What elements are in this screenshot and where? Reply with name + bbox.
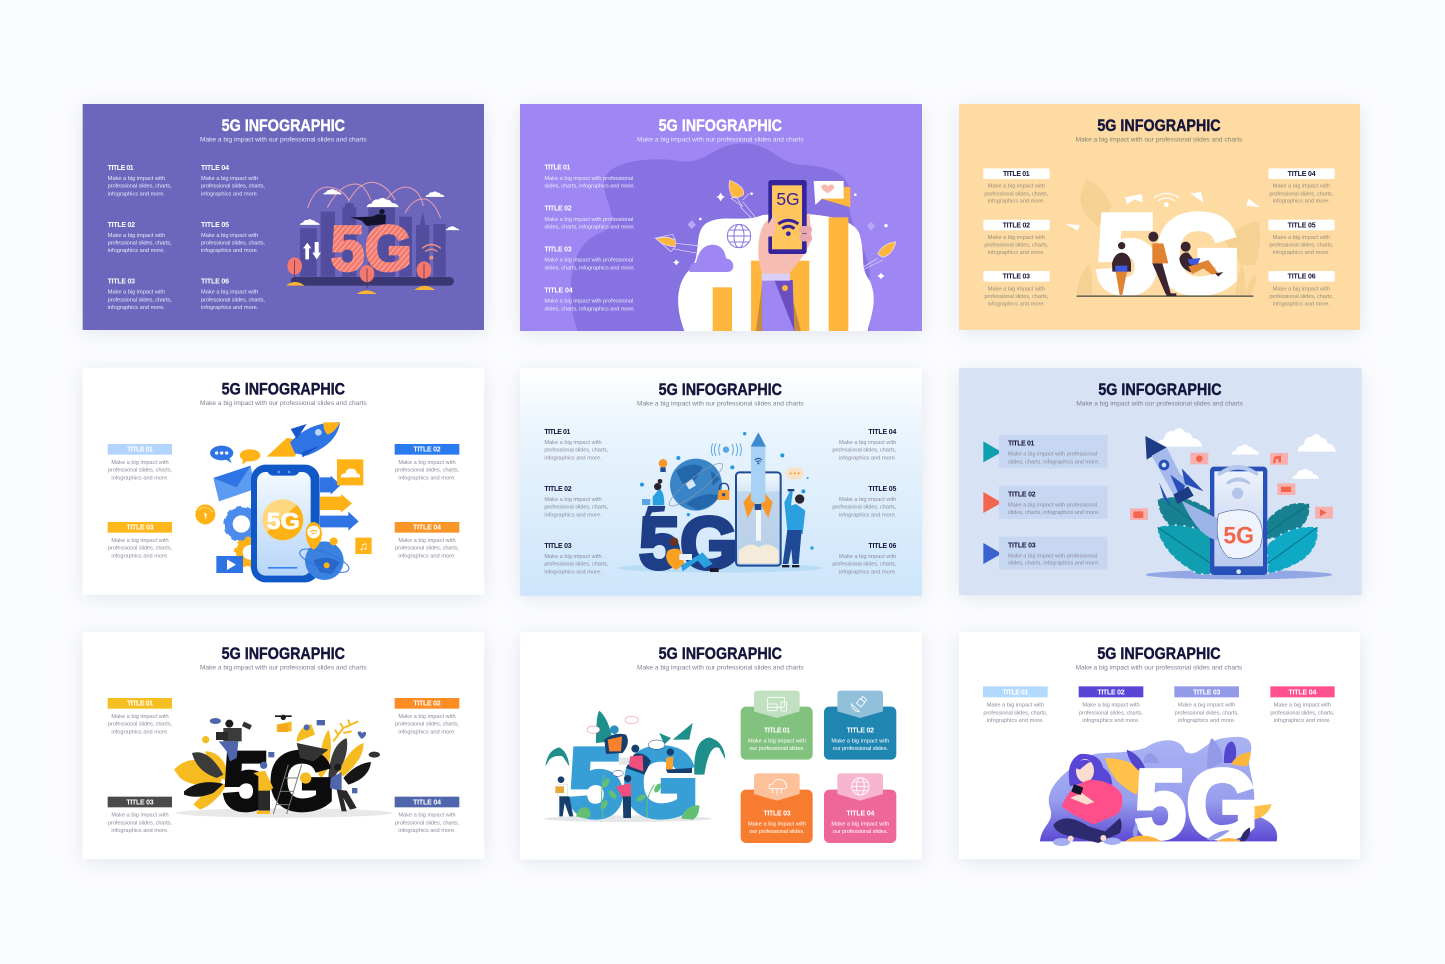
block: title 01: Make a big impact with [988,184,1045,190]
block: title 06: professional slides, charts, [1269,294,1334,300]
block: title 02: infographics and more. [398,729,456,735]
block: title 03: professional slides, charts, [984,294,1049,300]
block: title 04: infographics and more. [1274,718,1331,724]
block: title 03: infographics and more. [988,301,1045,307]
panel background [83,368,484,595]
panel background [520,368,922,596]
block: title 03 with blue arrow [983,537,1108,570]
background blob [571,143,870,331]
panel background [520,632,922,860]
card: title 03: Make a big impact with [748,822,806,828]
block: title 03: infographics and more. [111,828,169,834]
block: title 01: Make a big impact with [987,703,1044,709]
card: title 04: our professional slides. [833,829,888,835]
text block: title 06: Make a big impact with [839,554,896,560]
block: title 02: professional slides, charts, [1079,710,1143,716]
text block: title 04: infographics and more. [839,455,897,461]
block: title 03: TITLE 03 [1193,689,1220,696]
block: title 04: TITLE 04 [1288,689,1316,696]
block: title 06 [1268,271,1335,307]
panel background [83,632,484,859]
block: title 06: TITLE 06 [1288,274,1316,281]
block: title 02: Make a big impact with [988,235,1045,241]
text block: title 02 [544,206,635,231]
panel: white black-and-yellow 5G slide [83,632,484,859]
heading: 5G INFOGRAPHIC [1098,380,1222,399]
block: title 04: infographics and more. [398,828,456,834]
illustration: rocket, phone and leaves: 5G [1223,522,1254,549]
block: title 03 [108,797,172,834]
block: title 02: TITLE 02 [413,447,441,454]
text block: title 01: professional slides, charts, [108,184,172,190]
block: title 05: professional slides, charts, [1269,243,1334,249]
text block: title 02: professional slides, charts, [108,240,172,246]
text block: title 03: Make a big impact with [544,554,602,560]
text block: title 04: Make a big impact with [839,440,896,446]
text block: title 06: TITLE 06 [201,279,229,286]
heading: 5G INFOGRAPHIC [659,380,782,399]
block: title 03: professional slides, charts, [1175,710,1239,716]
text block: title 02: Make a big impact with [108,233,165,239]
illustration: globe, rocket, phone and 5G: 5G [639,503,738,585]
heading: 5G INFOGRAPHIC [659,644,782,663]
text block: title 05 [201,222,265,254]
text block: title 02: Make a big impact with professional [544,217,633,223]
card: title 01 [741,691,813,760]
card: title 04: TITLE 04 [846,810,874,817]
block: title 04: Make a big impact with [398,538,456,544]
block: title 02 [1079,686,1143,724]
block: title 02: TITLE 02 [413,701,441,708]
text block: title 03: infographics and more. [544,569,602,575]
block: title 01: professional slides, charts, [108,722,172,728]
text block: title 04: infographics and more. [201,191,259,197]
illustration: hand holding 5G phone with bars [654,180,896,331]
block: title 04: infographics and more. [1273,199,1330,205]
block: title 04: Make a big impact with [1274,703,1331,709]
block: title 03: TITLE 03 [126,525,154,532]
text block: title 01: professional slides, charts, [544,448,609,454]
subheading: Make a big impact with our professional slides and charts [637,136,804,143]
block: title 01: infographics and more. [987,718,1044,724]
panel background [520,104,922,331]
block: title 01 with teal arrow [983,435,1108,468]
text block: title 01: slides, charts, infographics and more. [544,184,635,190]
text block: title 05: infographics and more. [839,512,897,518]
block: title 01: TITLE 01 [1003,171,1030,178]
text block: title 02: TITLE 02 [544,206,572,213]
text block: title 03: professional slides, charts, [544,562,609,568]
text block: title 04 [201,165,265,197]
block: title 06: infographics and more. [1273,301,1330,307]
heading: 5G INFOGRAPHIC [222,379,345,398]
block: title 05: Make a big impact with [1273,235,1330,241]
text block: title 04: Make a big impact with professional [544,299,633,305]
block: title 04: TITLE 04 [413,799,441,806]
block: title 03: TITLE 03 [126,799,154,806]
block: title 02: infographics and more. [988,250,1045,256]
text block: title 06: infographics and more. [839,569,897,575]
block: title 03 [1174,686,1239,724]
text block: title 02 [544,486,609,518]
block: title 01: TITLE 01 [127,701,153,708]
block: title 05: TITLE 05 [1288,222,1316,229]
block: title 01: professional slides, charts, [983,710,1048,716]
block: title 03 [108,522,172,559]
block: title 03: Make a big impact with [111,813,169,819]
text block: title 06: TITLE 06 [868,543,896,550]
panel background [959,104,1360,330]
block: title 01 [108,444,172,481]
text block: title 05: professional slides, charts, [201,240,265,246]
block: title 01: infographics and more. [111,729,169,735]
block: title 04 [1268,168,1335,205]
card: title 01: Make a big impact with [748,739,806,745]
card: title 02: Make a big impact with [831,739,889,745]
block: title 01 [983,686,1048,724]
text block: title 06: professional slides, charts, [201,297,265,303]
illustration: black 5G with people and leaves: 5G [223,736,335,827]
block: title 04: professional slides, charts, [395,820,459,826]
block: title 03: infographics and more. [1178,718,1236,724]
block: title 01 with teal arrow: slides, charts, infographics and more. [1008,459,1100,465]
illustration: globe, rocket, phone and 5G [617,432,823,585]
illustration: phone with rocket and icons: ♫ [359,539,368,553]
block: title 03: TITLE 03 [1003,274,1030,281]
illustration: big 5G with three people: 5G [1097,193,1240,315]
block: title 01: TITLE 01 [127,447,153,454]
text block: title 03 [544,246,635,271]
text block: title 03: slides, charts, infographics and more. [544,265,635,271]
block: title 02: professional slides, charts, [395,722,459,728]
text block: title 06 [832,543,897,575]
text block: title 01: infographics and more. [108,191,165,197]
subheading: Make a big impact with our professional slides and charts [200,400,367,407]
block: title 03 with blue arrow: slides, charts, infographics and more. [1008,561,1100,567]
text block: title 03: professional slides, charts, [108,297,172,303]
text block: title 05: TITLE 05 [868,486,896,493]
block: title 05 [1268,220,1335,256]
block: title 04: TITLE 04 [413,525,441,532]
text block: title 02: infographics and more. [544,512,602,518]
block: title 02 [395,698,459,735]
illustration: phone with rocket and icons: 5G [267,508,300,534]
card: title 02 [824,691,896,760]
card: title 03: TITLE 03 [763,810,791,817]
text block: title 05: infographics and more. [201,248,259,254]
text block: title 04 [544,287,635,312]
subheading: Make a big impact with our professional slides and charts [1076,665,1243,672]
block: title 02: Make a big impact with [398,460,456,466]
illustration: black 5G with people and leaves [174,715,393,827]
text block: title 01: TITLE 01 [108,165,134,172]
block: title 04: Make a big impact with [1273,184,1330,190]
block: title 03: professional slides, charts, [108,820,172,826]
panel background [83,104,484,330]
text block: title 01: TITLE 01 [544,165,570,172]
text block: title 01 [544,165,635,190]
block: title 03: professional slides, charts, [108,546,172,552]
text block: title 05: TITLE 05 [201,222,229,229]
text block: title 02: infographics and more. [108,248,165,254]
text block: title 04: professional slides, charts, [201,184,265,190]
illustration: hand holding 5G phone with bars: 5G [776,189,800,209]
text block: title 03: Make a big impact with professional [544,258,633,264]
text block: title 04: TITLE 04 [868,429,896,436]
block: title 03: infographics and more. [111,553,169,559]
panel background [959,632,1360,859]
block: title 04: TITLE 04 [1288,171,1316,178]
block: title 01: infographics and more. [111,475,169,481]
block: title 03: Make a big impact with [988,286,1045,292]
block: title 02: infographics and more. [1082,718,1140,724]
text block: title 02: slides, charts, infographics and more. [544,225,635,231]
text block: title 04: TITLE 04 [201,165,229,172]
card: title 04 [824,773,896,843]
card: title 03: our professional slides. [749,829,805,835]
text block: title 01: Make a big impact with [108,176,165,182]
text block: title 04: slides, charts, infographics and more. [544,306,635,312]
block: title 02 with coral arrow [983,486,1108,519]
subheading: Make a big impact with our professional slides and charts [200,136,367,143]
text block: title 02: TITLE 02 [108,222,135,229]
panel: white card grid slide [520,632,922,860]
panel: light blue rocket launch slide [520,368,922,596]
illustration: blue 5G with people and plants: 5G [569,728,699,837]
block: title 01 [983,168,1050,205]
text block: title 03: TITLE 03 [108,279,135,286]
text block: title 06: Make a big impact with [201,290,258,296]
block: title 02 with coral arrow: slides, charts, infographics and more. [1008,510,1100,516]
illustration: rocket, phone and leaves [1130,428,1336,579]
illustration: woman with phone and big 5G: 5G [1135,749,1258,858]
heading: 5G INFOGRAPHIC [222,644,345,663]
block: title 01 with teal arrow: Make a big impact with professional [1008,452,1097,458]
illustration: blue 5G with people and plants [544,711,725,837]
text block: title 01: TITLE 01 [544,429,570,436]
block: title 04 [1270,686,1335,724]
block: title 03 with blue arrow: TITLE 03 [1008,542,1036,549]
card: title 02: our professional slides. [833,746,888,752]
text block: title 05: Make a big impact with [839,497,896,503]
text block: title 03 [544,543,609,575]
block: title 06: Make a big impact with [1273,286,1330,292]
text block: title 02: Make a big impact with [544,497,602,503]
block: title 03: Make a big impact with [111,538,169,544]
illustration: woman with phone and big 5G [1040,737,1277,858]
block: title 01 [108,698,172,735]
block: title 02: TITLE 02 [1097,689,1125,696]
block: title 02: TITLE 02 [1003,222,1030,229]
block: title 02: Make a big impact with [398,714,456,720]
text block: title 04: Make a big impact with [201,176,258,182]
block: title 02 with coral arrow: Make a big impact with professional [1008,502,1097,508]
card: title 04: Make a big impact with [831,822,889,828]
panel background [959,368,1362,595]
heading: 5G INFOGRAPHIC [1097,644,1221,663]
text block: title 03: Make a big impact with [108,290,165,296]
block: title 04: professional slides, charts, [1270,710,1335,716]
heading: 5G INFOGRAPHIC [659,116,782,135]
text block: title 02 [108,222,172,254]
panel: purple city 5G slide [83,104,484,330]
illustration: big 5G with three people [1066,180,1260,315]
subheading: Make a big impact with our professional slides and charts [1076,401,1244,408]
block: title 03 [983,271,1050,307]
block: title 04 [395,797,459,834]
text block: title 05: Make a big impact with [201,233,258,239]
card: title 01: our professional slides. [749,746,805,752]
block: title 01: TITLE 01 [1002,689,1028,696]
card: title 03 [741,773,813,843]
illustration: 5G city [286,182,459,294]
subheading: Make a big impact with our professional slides and charts [200,665,367,672]
text block: title 06 [201,279,265,311]
text block: title 05 [832,486,897,518]
block: title 01: Make a big impact with [111,714,169,720]
text block: title 05: professional slides, charts, [832,505,897,511]
block: title 04: Make a big impact with [398,813,456,819]
block: title 04 [395,522,459,559]
block: title 03 with blue arrow: Make a big impact with professional [1008,553,1097,559]
block: title 01: Make a big impact with [111,460,169,466]
text block: title 03 [108,279,172,311]
block: title 02: Make a big impact with [1082,703,1140,709]
subheading: Make a big impact with our professional slides and charts [637,665,804,672]
block: title 01: infographics and more. [988,199,1045,205]
text block: title 06: professional slides, charts, [832,562,897,568]
block: title 04: professional slides, charts, [395,546,459,552]
panel: violet hand and phone slide [520,104,922,331]
card: title 02: TITLE 02 [847,727,874,734]
subheading: Make a big impact with our professional slides and charts [637,401,804,408]
text block: title 01 [108,165,172,197]
text block: title 01: Make a big impact with [544,440,602,446]
text block: title 01: Make a big impact with professional [544,176,633,182]
block: title 01 with teal arrow: TITLE 01 [1008,441,1034,448]
panel: periwinkle rocket and leaves slide [959,368,1362,595]
block: title 04: professional slides, charts, [1269,191,1334,197]
block: title 02 [983,220,1050,256]
text block: title 01: infographics and more. [544,455,602,461]
text block: title 02: professional slides, charts, [544,505,609,511]
block: title 02 with coral arrow: TITLE 02 [1008,491,1036,498]
text block: title 03: TITLE 03 [544,543,572,550]
panel: white woman and 5G slide [959,632,1360,859]
card: title 01: TITLE 01 [764,727,790,734]
heading: 5G INFOGRAPHIC [1097,116,1221,135]
panel: yellow 5G people slide [959,104,1360,330]
block: title 02: professional slides, charts, [984,243,1049,249]
block: title 02: infographics and more. [398,475,456,481]
text block: title 03: TITLE 03 [544,246,572,253]
text block: title 06: infographics and more. [201,305,259,311]
block: title 02: professional slides, charts, [395,468,459,474]
illustration: 5G city: 5G [331,212,412,284]
text block: title 04: TITLE 04 [544,287,573,294]
block: title 04: infographics and more. [398,553,456,559]
panel: white phone and rocket slide [83,368,484,595]
text block: title 02: TITLE 02 [544,486,572,493]
block: title 01: professional slides, charts, [108,468,172,474]
block: title 01: professional slides, charts, [984,191,1049,197]
illustration: phone with rocket and icons [195,422,372,582]
heading: 5G INFOGRAPHIC [222,116,345,135]
text block: title 03: infographics and more. [108,305,165,311]
block: title 03: Make a big impact with [1178,703,1235,709]
block: title 02 [395,444,459,481]
text block: title 01 [544,429,609,461]
text block: title 04 [832,429,897,461]
text block: title 04: professional slides, charts, [832,448,897,454]
subheading: Make a big impact with our professional slides and charts [1076,136,1243,143]
block: title 05: infographics and more. [1273,250,1330,256]
